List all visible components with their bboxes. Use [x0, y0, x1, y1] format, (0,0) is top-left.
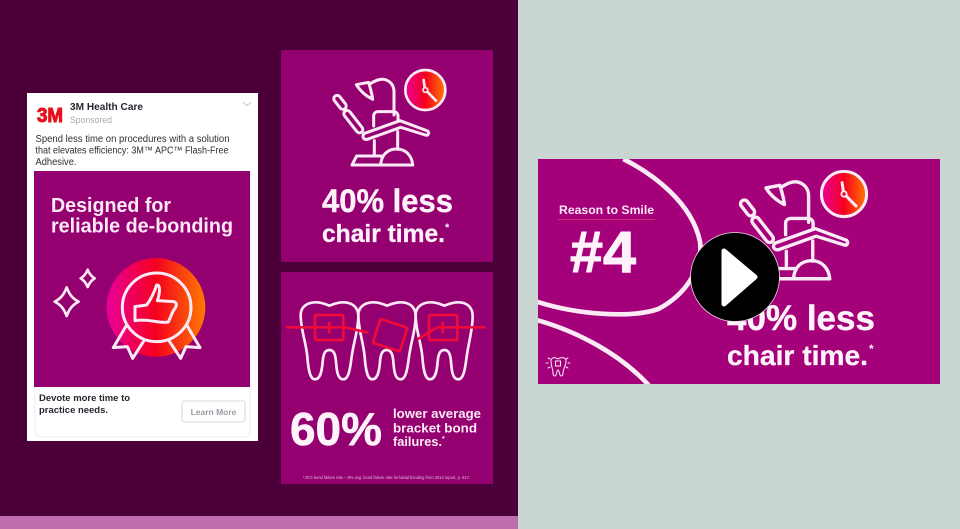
icon: dental chair — [739, 182, 848, 279]
ad headline: Designed for — [51, 195, 171, 217]
footer tagline: Devote more time to — [39, 393, 130, 404]
underline rule — [558, 219, 655, 220]
icon: play button — [690, 232, 780, 322]
background: dark plum section — [0, 0, 518, 516]
background: grey-green section — [518, 1, 960, 529]
label: reason to smile: Reason to Smile — [559, 205, 654, 217]
asterisk: * — [445, 222, 450, 234]
ad headline — [51, 195, 233, 238]
footnote: *JCO bond failure rate – 8% avg. bond failure rate for labial bonding from 2014 report, p. 617. — [303, 475, 470, 480]
stat description — [393, 406, 481, 449]
icon: clock — [821, 171, 867, 217]
ad body copy: Adhesive. — [36, 157, 76, 168]
ad body copy: that elevates efficiency: 3M™ APC™ Flash-Free — [36, 146, 229, 156]
stat description: failures. — [393, 434, 442, 449]
button: learn more — [182, 401, 245, 422]
ad image — [34, 171, 250, 387]
icon: award badge with thumb — [107, 258, 205, 358]
stat: 60%: 60% — [290, 403, 382, 455]
logo: 3M: 3M — [37, 105, 63, 127]
advertiser name: 3M Health Care — [70, 101, 143, 113]
icon: clock — [405, 70, 445, 110]
asterisk: * — [869, 342, 874, 356]
stat: 40% less: 40% less — [727, 299, 875, 338]
ad footer — [35, 387, 250, 437]
stat: chair time: chair time. — [322, 220, 445, 248]
stat description: bracket bond — [393, 420, 477, 436]
icon: dental chair — [332, 79, 429, 165]
ad body copy — [36, 134, 230, 168]
icon: teeth with brackets — [286, 302, 486, 379]
ad headline: reliable de-bonding — [51, 216, 233, 238]
ad body copy: Spend less time on procedures with a solution — [36, 134, 230, 145]
number: #4: #4 — [570, 220, 636, 285]
panel: 40% less chair time — [281, 50, 493, 262]
footer tagline — [39, 393, 130, 416]
stat description: * — [442, 436, 445, 443]
panel: video thumbnail — [537, 159, 940, 387]
stat description: lower average — [393, 406, 481, 421]
stat: chair time: chair time. — [727, 340, 868, 371]
button: learn more: Learn More — [191, 407, 237, 417]
icon: menu chevron — [243, 102, 251, 106]
icon: sparkles — [55, 270, 95, 316]
decorative curved lines — [537, 159, 700, 387]
icon: tooth with rays — [546, 358, 570, 376]
background: pink footer strip — [0, 516, 518, 529]
stat: 40% less: 40% less — [322, 183, 453, 219]
panel: social ad card — [27, 93, 258, 441]
footer tagline: practice needs. — [39, 405, 108, 416]
sponsored label: Sponsored — [70, 115, 112, 126]
panel: 60% lower bracket failures — [281, 272, 493, 484]
